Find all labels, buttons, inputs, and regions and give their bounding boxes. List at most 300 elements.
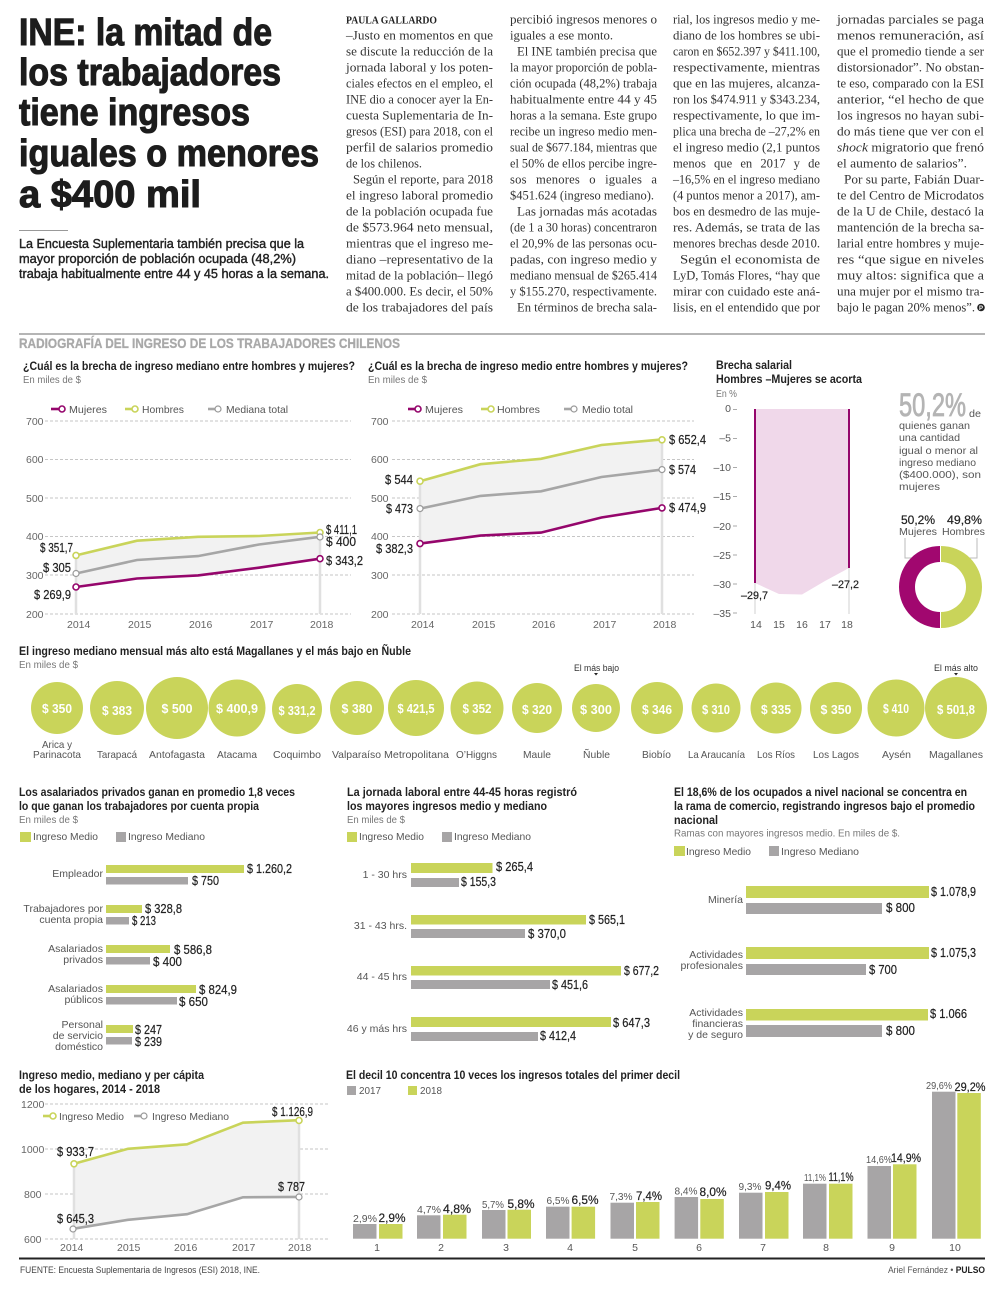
chart: gender donut: 49,8% [947, 515, 982, 527]
article column 1: –Justo en momentos en que [345, 28, 493, 42]
panel: occupation bars: Personal [62, 1019, 103, 1031]
panel: economic sector bars: $ 800 [886, 901, 915, 915]
panel: salary gap area chart: 16 [796, 619, 808, 631]
panel: occupation bars: En miles de $ [19, 814, 78, 826]
article column 4: bajo le pagan 20% menos”. [837, 300, 975, 314]
panel: income decile bars: 2 [438, 1242, 444, 1254]
panel: working hours bars [347, 785, 659, 1043]
article column 1: el ingreso laboral promedio [346, 188, 493, 202]
panel: working hours bars: $ 677,2 [624, 964, 659, 978]
panel: median income gap line chart: 2014 [67, 619, 91, 631]
panel: income decile bars: 2,9% [378, 1213, 406, 1225]
panel: income decile bars: 6,5% [546, 1195, 570, 1207]
article column 4: larial entre hombres y muje- [837, 236, 984, 250]
panel: working hours bars: $ 565,1 [589, 913, 625, 927]
article column 1: INE dio a conocer ayer la En- [346, 92, 493, 106]
panel: income decile bars: 2,9% [353, 1213, 377, 1225]
panel: income decile bars: 10 [949, 1242, 961, 1254]
panel: regional median income bubbles: $ 400,9 [216, 701, 258, 716]
panel: median income gap line chart: Mediana total [226, 404, 288, 416]
panel: occupation bars: $ 650 [179, 995, 208, 1009]
panel: mean income gap line chart: $ 473 [386, 502, 413, 516]
panel: regional median income bubbles: $ 421,5 [398, 701, 434, 716]
title [19, 12, 319, 216]
chart: gender donut: 50,2% [901, 515, 935, 527]
panel: salary gap area chart: –29,7 [741, 590, 768, 602]
panel: salary gap area chart: –25 [713, 550, 731, 562]
panel: working hours bars: $ 647,3 [613, 1016, 650, 1030]
callout: 50,2%: mujeres [899, 481, 940, 493]
callout: 50,2%: 50,2% [899, 387, 966, 423]
panel: occupation bars: Empleador [52, 868, 103, 880]
article column 4: te eso, comparado con la ESI [837, 76, 984, 90]
article column 2: El INE también precisa que [517, 44, 657, 58]
panel: occupation bars: Asalariados [48, 983, 103, 995]
article column 2: recibe un ingreso medio men- [510, 124, 657, 138]
panel: mean income gap line chart: 2017 [593, 619, 617, 631]
panel: median income gap line chart: Mujeres [69, 404, 107, 416]
panel: economic sector bars: Ingreso Medio [686, 846, 751, 858]
callout: 50,2%: igual o menor al [899, 445, 978, 457]
article column 2: En términos de brecha sala- [517, 300, 657, 314]
panel: household income line chart: 2014 [60, 1242, 84, 1254]
article column 1: jornada laboral y los poten- [345, 60, 493, 74]
article column 3: mirar con cuidado este aná- [673, 284, 820, 298]
panel: household income line chart: 800 [24, 1189, 42, 1201]
panel: regional median income bubbles: $ 410 [883, 701, 909, 716]
panel: household income line chart: 2016 [174, 1242, 198, 1254]
article column 2: horas a la semana. Este grupo [510, 108, 657, 122]
panel: median income gap line chart: Hombres [142, 404, 184, 416]
panel: economic sector bars: Minería [708, 894, 743, 906]
panel: working hours bars: 31 - 43 hrs. [354, 920, 407, 932]
panel: household income line chart: $ 933,7 [57, 1145, 94, 1159]
panel: regional median income bubbles: Coquimbo [273, 749, 321, 761]
panel: occupation bars: $ 586,8 [174, 943, 212, 957]
panel: income decile bars: 1 [374, 1242, 380, 1254]
panel: regional median income bubbles [19, 643, 987, 761]
panel: regional median income bubbles: $ 352 [462, 701, 492, 716]
panel: regional median income bubbles: Tarapacá [97, 749, 137, 761]
article column 4: muy altos: significa que a [837, 268, 984, 282]
panel: mean income gap line chart: 200 [371, 609, 389, 621]
panel: mean income gap line chart: 300 [371, 570, 389, 582]
article column 2: mediano mensual de $265.414 [510, 268, 658, 282]
panel: economic sector bars: nacional [674, 813, 718, 827]
chart: gender donut [899, 515, 985, 628]
article column 3: Según el economista de [680, 252, 820, 266]
article column 4 [836, 12, 985, 314]
panel: mean income gap line chart: $ 652,4 [669, 433, 706, 447]
panel: regional median income bubbles: El ingreso mediano mensual más alto está Magallanes y el más bajo en Ñuble [19, 643, 411, 658]
panel: income decile bars: 5,8% [508, 1199, 534, 1211]
article column 1: perfil de salarios promedio [346, 140, 493, 154]
panel: occupation bars: $ 239 [135, 1035, 162, 1049]
panel: mean income gap line chart: $ 382,3 [376, 542, 413, 556]
panel: mean income gap line chart: 500 [371, 493, 389, 505]
panel: income decile bars: 14,9% [891, 1153, 921, 1165]
article column 2: padas, con ingreso medio y [510, 252, 658, 266]
article column 2: el 20,9% de las personas ocu- [510, 236, 657, 250]
article column 4: distorsionador”. No obstan- [837, 60, 984, 74]
panel: income decile bars: 7,3% [610, 1191, 632, 1203]
panel: regional median income bubbles: Antofagasta [149, 749, 205, 761]
article column 3: plica una brecha de –27,2% en [673, 124, 821, 138]
title: a $400 mil [19, 174, 201, 216]
panel: household income line chart: 600 [24, 1234, 42, 1246]
panel: working hours bars: $ 265,4 [496, 860, 533, 874]
chart: gender donut: Mujeres [899, 526, 937, 538]
panel: economic sector bars: Actividades [689, 1007, 743, 1019]
panel: mean income gap line chart: 2016 [532, 619, 556, 631]
panel: salary gap area chart: –10 [713, 462, 731, 474]
panel: household income line chart: Ingreso medio, mediano y per cápita [19, 1068, 204, 1082]
panel: mean income gap line chart: 400 [371, 531, 389, 543]
panel: working hours bars: La jornada laboral entre 44-45 horas registró [347, 785, 577, 799]
panel: mean income gap line chart: $ 574 [669, 463, 696, 477]
panel: median income gap line chart: $ 343,2 [326, 554, 363, 568]
panel: regional median income bubbles: $ 500 [162, 701, 192, 716]
panel: median income gap line chart: 500 [26, 493, 44, 505]
panel: mean income gap line chart: $ 544 [385, 473, 413, 487]
panel: salary gap area chart: –15 [713, 491, 731, 503]
panel: regional median income bubbles: Atacama [217, 749, 257, 761]
panel: median income gap line chart: 600 [26, 454, 44, 466]
panel: occupation bars: privados [63, 954, 103, 966]
article column 3 [672, 12, 821, 314]
article column 4: de la U de Chile, destacó la [837, 204, 984, 218]
panel: income decile bars: 6,5% [572, 1195, 598, 1207]
panel: working hours bars: 46 y más hrs [347, 1023, 407, 1035]
panel: salary gap area chart: –20 [713, 521, 731, 533]
panel: mean income gap line chart [368, 359, 706, 631]
panel: occupation bars: de servicio [53, 1030, 103, 1042]
panel: median income gap line chart: 700 [26, 416, 44, 428]
panel: working hours bars: Ingreso Mediano [454, 831, 531, 843]
title: tiene ingresos [19, 92, 250, 134]
panel: economic sector bars: financieras [692, 1018, 743, 1030]
panel: regional median income bubbles: O’Higgns [456, 749, 497, 761]
panel: income decile bars: 2017 [359, 1085, 381, 1097]
article column 3: menores brechas desde 2010. [673, 236, 820, 250]
panel: economic sector bars: $ 1.078,9 [931, 885, 976, 899]
panel: working hours bars: los mayores ingresos medio y mediano [347, 799, 547, 813]
panel: economic sector bars: Ramas con mayores ingresos medio. En miles de $. [674, 828, 900, 840]
panel: regional median income bubbles: $ 501,8 [937, 702, 975, 717]
panel: household income line chart: 2018 [288, 1242, 312, 1254]
panel: household income line chart: Ingreso Medio [59, 1111, 124, 1123]
article column 2: percibió ingresos menores o [510, 12, 657, 26]
panel: regional median income bubbles: $ 383 [102, 703, 132, 718]
article column 1: Según el reporte, para 2018 [353, 172, 493, 186]
panel: household income line chart: 1000 [21, 1144, 45, 1156]
panel: regional median income bubbles: Magallanes [929, 749, 983, 761]
panel: mean income gap line chart: Mujeres [425, 404, 463, 416]
panel: income decile bars: 14,6% [866, 1154, 892, 1166]
panel: salary gap area chart: –30 [713, 579, 731, 591]
panel: salary gap area chart: –35 [713, 608, 731, 620]
article column 1: de $573.964 neto mensual, [346, 220, 493, 234]
panel: regional median income bubbles: $ 320 [522, 702, 552, 717]
article column 2: sual de $677.184, mientras que [510, 140, 657, 154]
panel: median income gap line chart: 300 [26, 570, 44, 582]
panel: regional median income bubbles: $ 350 [820, 702, 852, 717]
panel: regional median income bubbles: $ 331,2 [278, 703, 316, 718]
panel: income decile bars [346, 1068, 986, 1254]
article column 3: –16,5% en el ingreso mediano [672, 172, 820, 186]
article column 3: (4 puntos menor a 2017), am- [673, 188, 820, 202]
article column 4: jornadas parciales se paga [836, 12, 984, 26]
panel: regional median income bubbles: Ñuble [583, 748, 610, 761]
title: iguales o menores [19, 133, 319, 175]
article column 3: respectivamente, mientras [673, 60, 820, 74]
article column 1: se discute la reducción de la [346, 44, 493, 58]
panel: income decile bars: 4 [567, 1242, 573, 1254]
panel: mean income gap line chart: 2018 [653, 619, 677, 631]
panel: occupation bars: Trabajadores por [23, 903, 103, 915]
article column 2: habitualmente entre 44 y 45 [510, 92, 657, 106]
article column 4: anterior, “el hecho de que [837, 92, 984, 106]
panel: economic sector bars: Ingreso Mediano [781, 846, 859, 858]
panel: regional median income bubbles: $ 335 [761, 702, 791, 717]
article column 1: diano –representativo de la [346, 252, 493, 266]
panel: income decile bars: 8 [823, 1242, 829, 1254]
panel: income decile bars: 2018 [420, 1085, 442, 1097]
panel: salary gap area chart: 0 [725, 403, 731, 415]
article column 3: que en las mujeres, alcanza- [673, 76, 820, 90]
panel: working hours bars: 44 - 45 hrs [357, 971, 407, 983]
panel: occupation bars: $ 750 [192, 874, 219, 888]
chart: gender donut: Hombres [942, 526, 985, 538]
callout: 50,2%: de [969, 408, 981, 420]
section heading: RADIOGRAFÍA DEL INGRESO DE LOS TRABAJADORES CHILENOS [19, 336, 400, 351]
panel: mean income gap line chart: 700 [371, 416, 389, 428]
panel: household income line chart: Ingreso Mediano [152, 1111, 229, 1123]
panel: regional median income bubbles: $ 300 [580, 702, 612, 717]
panel: mean income gap line chart: ¿Cuál es la brecha de ingreso medio entre hombres y mujeres? [368, 359, 688, 373]
article column 2: sos menores o iguales a [510, 172, 657, 186]
panel: economic sector bars: y de seguro [688, 1029, 743, 1041]
panel: salary gap area chart: 17 [819, 619, 831, 631]
article column 3: ron los $474.911 y $343.234, [673, 92, 820, 106]
panel: income decile bars: 7 [760, 1242, 766, 1254]
article column 4: que el promedio tiende a ser [837, 44, 985, 58]
article column 3: respectivamente, lo que im- [673, 108, 820, 122]
panel: income decile bars: 29,6% [926, 1080, 952, 1092]
panel: income decile bars: 11,1% [804, 1172, 826, 1184]
article column 4: una mujer por el mismo tra- [837, 284, 984, 298]
article column 3: diano de los hombres se ubi- [673, 28, 820, 42]
subtitle: La Encuesta Suplementaria también precisa que la [19, 236, 305, 251]
article column 3: el ingreso medio (2,1 puntos [673, 140, 820, 154]
panel: income decile bars: 5 [632, 1242, 638, 1254]
callout: 50,2% [899, 387, 981, 493]
panel: economic sector bars: $ 700 [869, 963, 897, 977]
panel: household income line chart [19, 1068, 328, 1254]
panel: occupation bars: cuenta propia [39, 914, 103, 926]
article column 4: los ingresos no hayan subi- [837, 108, 984, 122]
panel: regional median income bubbles: El más bajo [574, 663, 619, 674]
subtitle: mayor proporción de población ocupada (48,2%) [19, 251, 296, 266]
panel: income decile bars: 9,4% [765, 1180, 791, 1192]
icon: pulso end mark: P [979, 306, 983, 312]
panel: income decile bars: 9 [889, 1242, 895, 1254]
panel: median income gap line chart [23, 359, 363, 631]
panel: regional median income bubbles: Los Lagos [813, 749, 859, 761]
panel: salary gap area chart: 14 [750, 619, 762, 631]
panel: economic sector bars: $ 800 [886, 1024, 915, 1038]
panel: regional median income bubbles: $ 350 [42, 701, 72, 716]
panel: regional median income bubbles: Arica y [42, 739, 73, 751]
article column 3: caron en $652.397 y $411.100, [673, 44, 820, 58]
article column 3: menos que en 2017 y de [673, 156, 820, 170]
article column 4: do más tiene que ver con el [837, 124, 985, 138]
panel: household income line chart: 2015 [117, 1242, 141, 1254]
panel: economic sector bars [674, 785, 976, 1041]
panel: economic sector bars: $ 1.075,3 [931, 946, 976, 960]
article column 3: res. Además, se trata de las [673, 220, 820, 234]
panel: salary gap area chart: Hombres –Mujeres se acorta [716, 372, 862, 386]
panel: income decile bars: 29,2% [954, 1082, 986, 1094]
article column 2: (de 1 a 30 horas) concentraron [510, 220, 658, 234]
article column 4: el aumento de salarios”. [837, 156, 967, 170]
panel: economic sector bars: profesionales [681, 960, 743, 972]
panel: income decile bars: 4,7% [417, 1204, 441, 1216]
panel: regional median income bubbles: En miles de $ [19, 659, 78, 671]
panel: median income gap line chart: $ 269,9 [34, 588, 71, 602]
panel: salary gap area chart: 18 [841, 619, 853, 631]
article column 1: PAULA GALLARDO [346, 14, 437, 26]
panel: occupation bars [19, 785, 295, 1053]
callout: 50,2%: quienes ganan [899, 420, 970, 432]
panel: working hours bars: $ 451,6 [552, 978, 588, 992]
credit: Ariel Fernández • PULSO [888, 1265, 985, 1276]
panel: salary gap area chart: Brecha salarial [716, 358, 792, 372]
article column 4: res “que sigue en niveles [837, 252, 984, 266]
article column 1: a $400.000. Es decir, el 50% [346, 284, 494, 298]
callout: 50,2%: ($400.000), son [899, 469, 981, 481]
article column 1: de los chilenos. [346, 156, 422, 170]
article column 1: cuesta Suplementaria de In- [346, 108, 493, 122]
panel: working hours bars: $ 412,4 [540, 1029, 576, 1043]
article column 4: te del Centro de Microdatos [837, 188, 984, 202]
panel: regional median income bubbles: Biobío [642, 749, 671, 761]
panel: occupation bars: doméstico [55, 1041, 103, 1053]
panel: regional median income bubbles: Parinacota [33, 749, 81, 761]
article column 1: mitad de la población– llegó [346, 268, 493, 282]
panel: occupation bars: $ 328,8 [145, 902, 182, 916]
panel: salary gap area chart: 15 [773, 619, 785, 631]
panel: salary gap area chart: –5 [719, 432, 731, 444]
panel: mean income gap line chart: 2014 [411, 619, 435, 631]
article column 1: de la población ocupada fue [346, 204, 493, 218]
panel: household income line chart: $ 787 [278, 1180, 305, 1194]
panel: median income gap line chart: $ 305 [43, 561, 71, 575]
panel: household income line chart: de los hogares, 2014 - 2018 [19, 1082, 160, 1096]
article column 1 [345, 14, 494, 314]
panel: income decile bars: El decil 10 concentra 10 veces los ingresos totales del primer decil [346, 1068, 680, 1082]
article column 1: de los trabajadores del país [346, 300, 493, 314]
article column 2: iguales a ese monto. [510, 28, 613, 42]
panel: median income gap line chart: 200 [26, 609, 44, 621]
panel: household income line chart: $ 645,3 [57, 1212, 94, 1226]
article column 1: gresos (ESI) para 2018, con el [346, 124, 493, 138]
article column 2: la mayor proporción de pobla- [510, 60, 657, 74]
panel: regional median income bubbles: El más alto [934, 663, 978, 674]
panel: income decile bars: 11,1% [828, 1172, 854, 1184]
article column 3: LyD, Tomás Flores, “hay que [673, 268, 820, 282]
panel: working hours bars: 1 - 30 hrs [363, 869, 407, 881]
panel: income decile bars: 6 [696, 1242, 702, 1254]
article column 2 [510, 12, 658, 314]
panel: income decile bars: 3 [503, 1242, 509, 1254]
panel: income decile bars: 7,4% [636, 1191, 662, 1203]
panel: median income gap line chart: ¿Cuál es la brecha de ingreso mediano entre hombres y mujeres? [23, 359, 355, 373]
panel: mean income gap line chart: $ 474,9 [669, 501, 706, 515]
article column 4: mantención de la brecha sa- [837, 220, 984, 234]
panel: working hours bars: En miles de $ [347, 814, 405, 826]
panel: regional median income bubbles: Los Ríos [757, 749, 795, 761]
callout: 50,2%: una cantidad [899, 432, 960, 444]
panel: median income gap line chart: 2018 [310, 619, 334, 631]
article column 4: menos remuneración, así [837, 28, 985, 42]
panel: median income gap line chart: En miles de $ [23, 374, 81, 386]
panel: median income gap line chart: 2016 [189, 619, 213, 631]
panel: occupation bars: $ 400 [153, 955, 182, 969]
panel: mean income gap line chart: 600 [371, 454, 389, 466]
panel: working hours bars: $ 370,0 [528, 927, 566, 941]
panel: regional median income bubbles: $ 380 [342, 701, 372, 716]
panel: regional median income bubbles: $ 310 [702, 702, 730, 717]
panel: working hours bars: Ingreso Medio [359, 831, 424, 843]
panel: household income line chart: 2017 [232, 1242, 256, 1254]
panel: salary gap area chart: En % [716, 388, 737, 400]
panel: mean income gap line chart: Medio total [582, 404, 633, 416]
article column 3: rial, los ingresos medio y me- [673, 12, 820, 26]
panel: occupation bars: Ingreso Mediano [128, 831, 205, 843]
article column 1: ciales efectos en el empleo, el [346, 76, 493, 90]
panel: income decile bars: 8,4% [674, 1186, 698, 1198]
article column 2: $451.624 (ingreso mediano). [510, 188, 654, 202]
panel: household income line chart: 1200 [21, 1099, 45, 1111]
panel: occupation bars: Asalariados [48, 943, 103, 955]
panel: occupation bars: $ 247 [135, 1023, 162, 1037]
panel: regional median income bubbles: Maule [523, 749, 551, 761]
article column 4: Por su parte, Fabián Duar- [844, 172, 984, 186]
panel: income decile bars: 5,7% [482, 1199, 504, 1211]
panel: income decile bars: 4,8% [443, 1204, 471, 1216]
article column 3: bos en desmedro de las muje- [673, 204, 820, 218]
panel: working hours bars: $ 155,3 [461, 875, 496, 889]
subtitle: trabaja habitualmente entre 44 y 45 horas a la semana. [19, 266, 329, 281]
panel: median income gap line chart: 400 [26, 531, 44, 543]
article column 2: Las jornadas más acotadas [517, 204, 657, 218]
panel: occupation bars: $ 213 [132, 914, 156, 928]
panel: income decile bars: 9,3% [738, 1181, 762, 1193]
panel: economic sector bars: $ 1.066 [930, 1007, 967, 1021]
article column 2: ción ocupada (48,2%) trabaja [510, 76, 657, 90]
panel: occupation bars: públicos [64, 994, 103, 1006]
panel: occupation bars: $ 1.260,2 [247, 862, 292, 876]
panel: occupation bars: Ingreso Medio [33, 831, 98, 843]
icon: pulso end mark [977, 304, 985, 312]
source note: FUENTE: Encuesta Suplementaria de Ingresos (ESI) 2018, INE. [20, 1265, 260, 1276]
panel: salary gap area chart: –27,2 [832, 579, 859, 591]
callout: 50,2%: ingreso mediano [899, 457, 976, 469]
article column 1: mientras que el ingreso me- [346, 236, 493, 250]
panel: mean income gap line chart: En miles de $ [368, 374, 427, 386]
panel: occupation bars: lo que ganan los trabajadores por cuenta propia [19, 799, 259, 813]
